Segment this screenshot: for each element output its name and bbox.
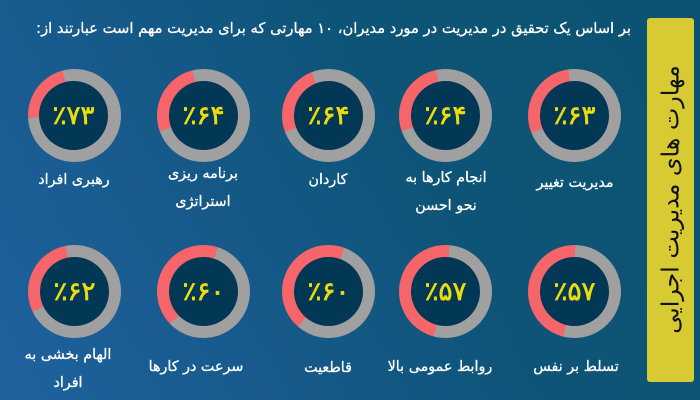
donut: competent 64 — [282, 69, 375, 162]
donut: speed 60 — [157, 245, 250, 338]
label: strategic planning: برنامه ریزی — [168, 166, 238, 182]
donut: decisiveness 60 — [282, 245, 375, 338]
label: competent: کاردان — [309, 172, 347, 188]
donut: public relations 57: ٪۵۷ — [425, 277, 466, 307]
donut: confidence 57 — [528, 245, 621, 338]
donut: public relations 57 — [399, 245, 492, 338]
donut: confidence 57: ٪۵۷ — [554, 277, 595, 307]
label: speed: سرعت در کارها — [149, 359, 243, 375]
heading text: بر اساس یک تحقیق در مدیریت در مورد مدیران، ۱۰ مهارتی که برای مدیریت مهم است عبارتند از: — [36, 20, 631, 37]
title panel — [647, 18, 694, 382]
label: decisiveness: قاطعیت — [304, 360, 352, 376]
label: confidence: تسلط بر نفس — [533, 359, 619, 375]
label: leadership: رهبری افراد — [38, 172, 110, 188]
label: inspiring people: الهام بخشی به — [25, 347, 111, 363]
donut: doing work well 64 — [399, 69, 492, 162]
label: doing work well: نحو احسن — [415, 198, 477, 214]
donut: strategic planning 64 — [157, 69, 250, 162]
label: inspiring people: افراد — [53, 375, 83, 391]
donut: inspiring people 62: ٪۶۲ — [54, 277, 95, 307]
donut: competent 64: ٪۶۴ — [308, 101, 349, 131]
label: strategic planning — [168, 166, 238, 210]
label: public relations: روابط عمومی بالا — [388, 359, 492, 375]
donut: speed 60: ٪۶۰ — [183, 277, 224, 307]
donut: doing work well 64: ٪۶۴ — [425, 101, 466, 131]
donut: decisiveness 60: ٪۶۰ — [308, 277, 349, 307]
title: مهارت های مدیریت اجرایی — [656, 65, 684, 334]
label: change management: مدیریت تغییر — [536, 175, 614, 191]
donut: inspiring people 62 — [28, 245, 121, 338]
donut: strategic planning 64: ٪۶۴ — [183, 101, 224, 131]
label: doing work well — [405, 170, 487, 214]
label: strategic planning: استراتژی — [175, 194, 231, 210]
label: doing work well: انجام کارها به — [405, 170, 487, 186]
label: inspiring people — [25, 347, 111, 391]
donut: change management 63: ٪۶۳ — [554, 101, 595, 131]
donut: leadership 73 — [28, 69, 121, 162]
donut: change management 63 — [528, 69, 621, 162]
donut: leadership 73: ٪۷۳ — [53, 101, 94, 131]
